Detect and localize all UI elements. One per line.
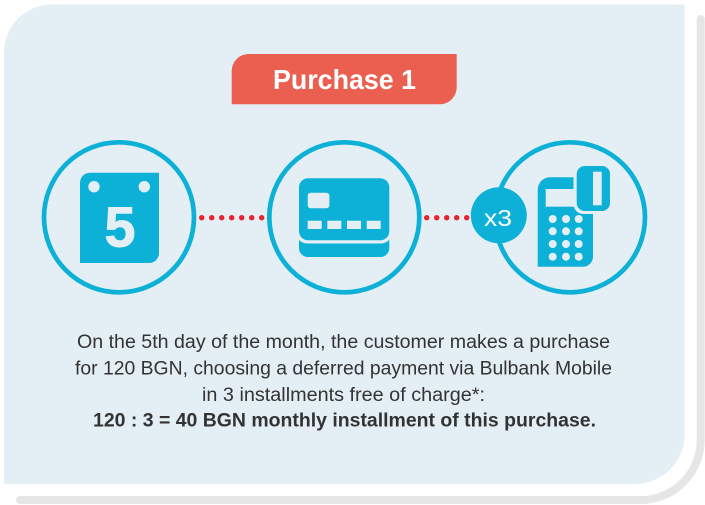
icon: bank card in circle (269, 142, 419, 292)
text block: description: 120 : 3 = 40 BGN monthly installment of this purchase. (93, 410, 596, 432)
text block: description (75, 332, 612, 432)
dotted connector: calendar to card (199, 215, 264, 220)
icon: calendar in circle (44, 142, 194, 292)
text block: description: On the 5th day of the month, the customer makes a purchase (77, 332, 610, 353)
text block: description: in 3 installments free of charge*: (202, 385, 485, 406)
badge: x3 installments: x3 (484, 205, 512, 231)
text block: description: for 120 BGN, choosing a deferred payment via Bulbank Mobile (75, 358, 612, 380)
heading: Purchase 1 (232, 54, 457, 104)
icon: payment terminal in circle (495, 142, 645, 292)
heading: Purchase 1: Purchase 1 (273, 64, 416, 95)
icon: calendar in circle: 5 (104, 196, 136, 260)
dotted connector: card to installments (424, 215, 469, 220)
badge: x3 installments (471, 187, 527, 243)
